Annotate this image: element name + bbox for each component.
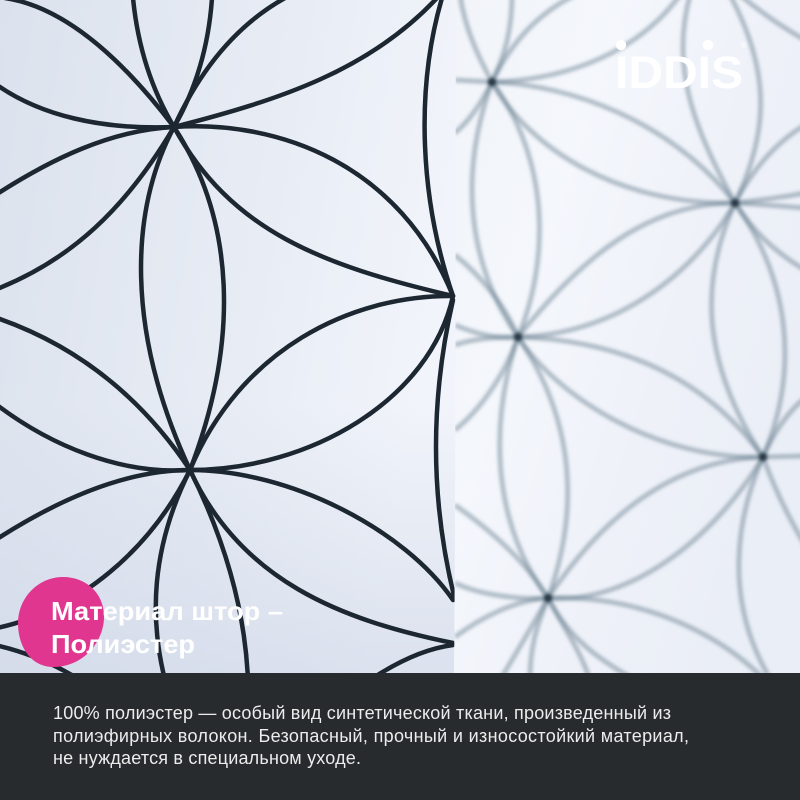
panel: blurred background fabric [450, 0, 800, 680]
logo: IDDIS: ® [741, 41, 747, 50]
decorative pink blob [18, 577, 104, 667]
sharp flower pattern [0, 0, 455, 680]
blurred flower pattern [455, 0, 800, 680]
heading: Материал штор – [51, 596, 283, 626]
description text: не нуждается в специальном уходе. [53, 748, 361, 768]
panel: dark description bar [0, 673, 800, 800]
description text: 100% полиэстер — особый вид синтетической ткани, произведенный из [53, 703, 671, 723]
panel: sharp foreground curtain [0, 0, 456, 680]
heading: Полиэстер [51, 629, 195, 659]
logo: IDDIS: IDDIS [615, 47, 743, 98]
description text: полиэфирных волокон. Безопасный, прочный и износостойкий материал, [53, 726, 689, 746]
